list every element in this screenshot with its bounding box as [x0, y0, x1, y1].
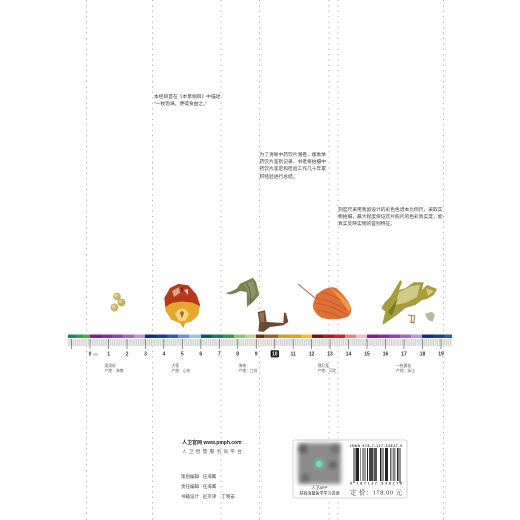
- caption: seed note: 本经目首在《本草纲目》中描述: [154, 94, 221, 100]
- specimen: curled leaf with root: [226, 278, 288, 332]
- ruler scale: 1: [107, 352, 110, 358]
- ruler scale: 11: [291, 352, 296, 358]
- QR caption: 人卫APP: [311, 485, 328, 490]
- ruler scale: 13: [327, 352, 333, 358]
- ruler scale: 14: [346, 352, 351, 358]
- ruler scale: 15: [364, 352, 370, 358]
- barcode panel: [293, 440, 407, 498]
- specimen label 4: [318, 363, 336, 373]
- specimen label 1: 莲须籽: [104, 364, 116, 368]
- caption: photo note: 积经验进行总结。: [260, 175, 298, 180]
- specimen: round seeds: [110, 293, 125, 312]
- caption: seed note: [154, 94, 221, 107]
- specimen label 4: 锦灯笼: [318, 364, 329, 368]
- specimen label 5: [396, 363, 415, 373]
- ISBN: ISBN 978-7-117-33627-9: [350, 444, 402, 448]
- ruler scale: 7: [218, 352, 221, 358]
- specimen: orange lantern calyx: [298, 284, 351, 319]
- specimen label 5: 一枝黄花: [396, 364, 411, 368]
- QR code blurred: [298, 443, 341, 484]
- specimen label 1: 产地：海南: [104, 368, 123, 372]
- ruler scale: 3: [144, 352, 147, 358]
- specimen label 2: 大枣: [172, 364, 179, 368]
- publisher name: 人卫智慧服务商平台: [182, 448, 244, 454]
- ruler scale: 0: [89, 352, 92, 358]
- specimen: olive green herb: [381, 280, 437, 324]
- caption: photo note: [260, 152, 326, 180]
- barcode panel: 获取海量医学学习资源: [300, 490, 340, 496]
- specimen: red-yellow dried fruit slice: [164, 284, 200, 328]
- ruler scale: 2: [126, 352, 129, 358]
- specimen label 4: 产地：河北: [318, 368, 336, 372]
- caption: photo note: 药饮片鉴定和检验工作几十年累: [260, 167, 326, 172]
- specimen label 5: 产地：浙江: [396, 368, 415, 372]
- ruler colour bar: [68, 334, 452, 338]
- caption: design note: 刻度尺采用我留设计的彩色色谱本比例尺，采取实: [338, 208, 443, 212]
- caption: design note: 真实反映实物的鉴别特征。: [338, 222, 395, 227]
- ruler scale: cm: [93, 353, 98, 357]
- barcode digits: 9 787117 336279: [350, 482, 402, 486]
- specimen label 3: 产地：江苏: [238, 368, 257, 372]
- caption: photo note: 为了清晰中药饮片溯卷，版象举: [260, 152, 326, 158]
- ruler scale: 17: [401, 352, 407, 358]
- barcode: [354, 448, 401, 483]
- ruler scale: 5: [181, 352, 184, 358]
- ruler scale: 16: [383, 352, 388, 358]
- ruler scale: 10: [272, 352, 278, 358]
- publisher website: 人卫官网 www.pmph.com: [182, 440, 242, 446]
- editor credits: 策划编辑 任海鹰 责任编辑 任海鹰 书籍设计 赵京津 丁晓安: [181, 474, 235, 499]
- price: 定 价：178.00 元: [350, 488, 403, 496]
- ruler scale: 6: [199, 352, 202, 358]
- specimen label 1: [104, 363, 124, 372]
- ruler scale: 18: [420, 352, 425, 358]
- ruler scale: 4: [163, 352, 166, 358]
- ruler scale: 19: [438, 352, 444, 358]
- caption: design note: [338, 206, 443, 227]
- ruler scale: 12: [309, 352, 315, 358]
- caption: photo note: 药饮片鉴别记录，书者将拍摄中: [260, 160, 326, 165]
- specimen label 2: [172, 363, 190, 373]
- specimen label 3: 海带: [238, 364, 246, 368]
- ruler scale: 9: [255, 352, 258, 358]
- ruler scale: 8: [236, 352, 239, 358]
- specimen label 2: 产地：山东: [172, 368, 190, 372]
- caption: design note: 物拍摄，最大程度保证饮片照片的色彩真实度，能: [338, 215, 443, 220]
- specimen label 3: [238, 364, 258, 373]
- ruler scale: [68, 339, 452, 358]
- caption: seed note: “一枚饱满，便得食益之。”: [154, 102, 207, 107]
